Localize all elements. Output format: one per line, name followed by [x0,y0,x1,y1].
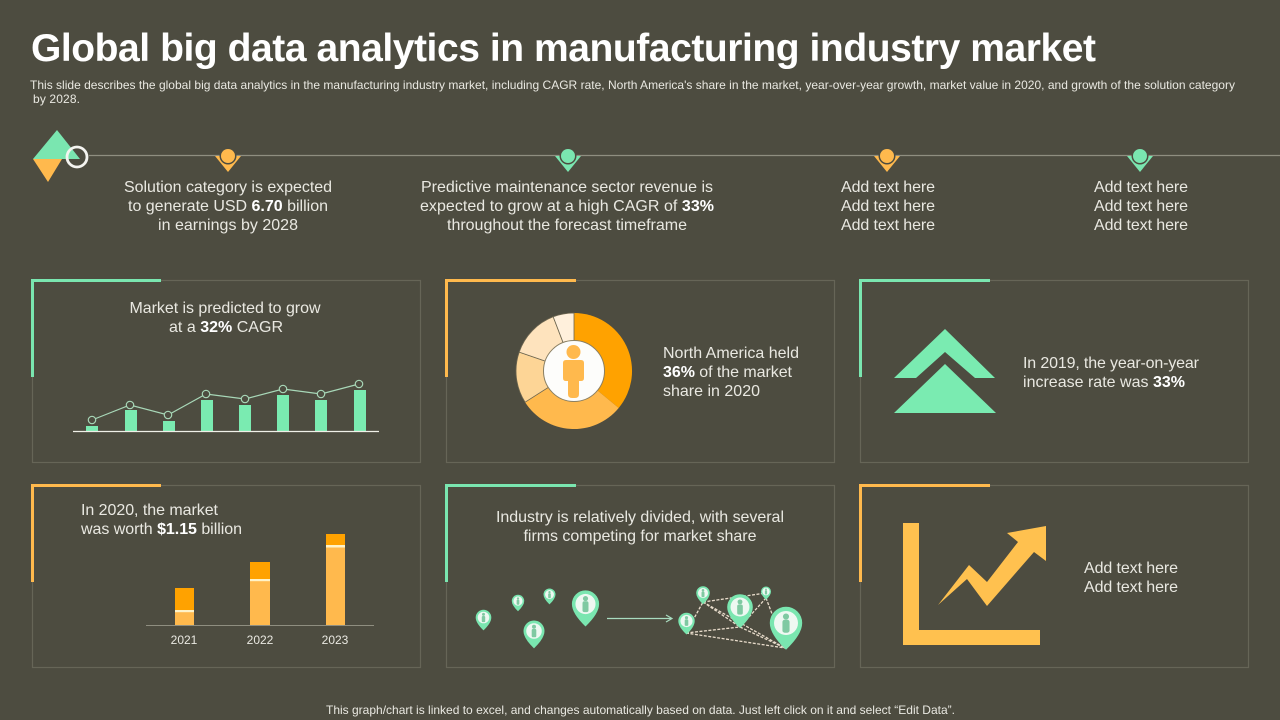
text: North America: 36% of the market [663,364,793,381]
text: solution category: in earnings by 2028 [158,217,298,234]
heading: CAGR: Market is predicted to grow [130,300,321,317]
stacked bar chart: 2021 [171,633,198,647]
icon: green marker 4 [1127,148,1153,172]
panel: growth icon [860,486,1248,668]
text: placeholder: Add text here [1084,560,1178,577]
text: North America: share in 2020 [663,383,760,400]
panel: CAGR [32,280,420,462]
text: solution category [124,179,332,234]
text: placeholder 4: Add text here [1094,217,1188,234]
network of dashed links [686,593,785,648]
description [30,78,1235,106]
icon: orange marker 3 [874,148,900,172]
icon: orange marker 1 [215,148,241,172]
bar and line chart [73,380,379,432]
text: placeholder 3: Add text here [841,217,935,234]
text: solution category: to generate USD 6.70 billion [128,198,328,215]
panel: North America share [446,280,834,462]
text: divided industry: firms competing for market share [524,528,757,545]
text: market worth [80,502,242,538]
icon: green marker 2 [555,148,581,172]
stacked bar chart [146,534,374,647]
text: placeholder 4: Add text here [1094,198,1188,215]
text: year-on-year: increase rate was 33% [1023,374,1185,391]
description: by 2028. [33,92,80,106]
text: market worth: was worth $1.15 billion [80,521,242,538]
text: North America: North America held [663,345,799,362]
icon: person [563,345,584,398]
text: predictive maintenance: Predictive maintenance sector revenue is [421,179,713,196]
text: year-on-year: In 2019, the year-on-year [1023,355,1200,372]
text: placeholder 4 [1094,179,1188,234]
description: This slide describes the global big data analytics in the manufacturing industry market, including CAGR rate, North America's share in the market, year-over-year growth, market value in 2020, and growth of the solution category [30,78,1235,92]
icon: growth chart arrow [903,523,1046,645]
text: placeholder 3 [841,179,935,234]
text: placeholder [1084,560,1178,596]
heading: CAGR: at a 32% CAGR [169,319,283,336]
panel: market worth [32,486,420,668]
heading: CAGR [130,300,321,336]
stacked bar chart: 2023 [322,633,349,647]
panel: year-on-year [860,280,1248,462]
text: predictive maintenance [420,179,714,234]
arrow [607,615,672,622]
text: North America [663,345,799,400]
text: placeholder 4: Add text here [1094,179,1188,196]
text: predictive maintenance: expected to grow at a high CAGR of 33% [420,198,714,215]
text: divided industry [496,509,784,545]
title: Global big data analytics in manufacturing industry market [31,27,1096,70]
icon: double chevron up [894,329,996,413]
text: divided industry: Industry is relatively divided, with several [496,509,784,526]
donut chart [516,313,632,429]
timeline [33,130,1280,182]
text: market worth: In 2020, the market [81,502,219,519]
map pins: separate firms [476,588,599,648]
stacked bar chart: 2022 [247,633,274,647]
text: placeholder 3: Add text here [841,179,935,196]
text: placeholder 3: Add text here [841,198,935,215]
text: solution category: Solution category is expected [124,179,332,196]
text: predictive maintenance: throughout the forecast timeframe [447,217,687,234]
panel: divided industry [446,486,834,668]
map pins: connected firms [678,586,802,650]
icon: diamond start marker [33,130,87,182]
text: placeholder: Add text here [1084,579,1178,596]
footer note: This graph/chart is linked to excel, and changes automatically based on data. Just left click on it and select “Edit Data”. [326,703,955,717]
text: year-on-year [1023,355,1200,391]
